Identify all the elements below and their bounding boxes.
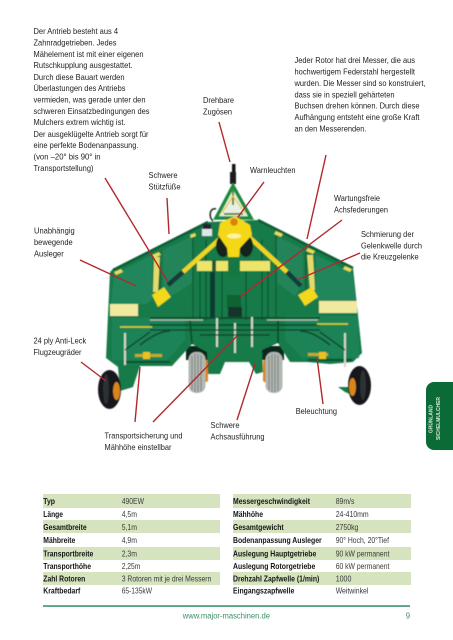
text block: Antrieb: Überlastungen des Antriebs	[34, 83, 126, 93]
label: Drehbare Zugösen: Drehbare	[203, 95, 234, 105]
side tab: Grünland Sichelmulcher: SICHELMULCHER	[436, 397, 442, 440]
icon: right middle wheel	[261, 346, 284, 393]
text block: Rotor: Aufhängung entsteht eine große Kraft	[294, 112, 420, 122]
text block: Antrieb: Zahnradgetrieben. Jedes	[34, 38, 116, 48]
right yellow gearbox	[298, 287, 318, 306]
table: left specs: 2,25m	[122, 562, 141, 571]
text block: Antrieb: Der Antrieb besteht aus 4	[34, 26, 118, 36]
table: right specs: Mähhöhe	[233, 510, 263, 519]
pointer: Flugzeugräder	[81, 362, 106, 381]
label: Beleuchtung: Beleuchtung	[296, 406, 337, 416]
icon: left middle wheel	[186, 346, 209, 393]
pointer: Warnleuchten	[238, 182, 264, 217]
side tab: Grünland Sichelmulcher	[426, 382, 453, 450]
text block: Antrieb: schweren Einsatzbedingungen des	[34, 106, 150, 116]
gear housing highlight	[227, 234, 241, 238]
right model plate	[319, 301, 357, 313]
label: Unabhängig bewegende Ausleger: bewegende	[34, 237, 73, 247]
centre gearbox block	[227, 295, 242, 317]
icon: left outer wheel	[98, 370, 121, 409]
label: Schmierung: die Kreuzgelenke	[361, 252, 419, 262]
centre deck ribs	[200, 240, 268, 320]
left yellow gearbox	[152, 287, 171, 307]
table: right specs: Messergeschwindigkeit	[233, 497, 310, 506]
text block: Antrieb: Mähelement ist mit einer eigenen	[34, 49, 144, 59]
table: right specs: 89m/s	[336, 497, 354, 506]
label: Flugzeugräder: 24 ply Anti-Leck	[34, 336, 87, 346]
table: left specs: Transporthöhe	[43, 562, 91, 571]
text block: Antrieb: (von –20° bis 90° in	[34, 152, 101, 162]
text block: Antrieb: Durch diese Bauart werden	[34, 72, 125, 82]
table: right specs: Gesamtgewicht	[233, 523, 284, 532]
label: Unabhängig bewegende Ausleger: Unabhängig	[34, 226, 75, 236]
text block: Rotor: dass sie in speziell gehärteten	[294, 90, 395, 100]
text block: Rotor: hochwertigem Federstahl hergestellt	[294, 66, 416, 76]
yellow crossbar	[197, 256, 270, 276]
table: left specs: Mähbreite	[43, 536, 76, 545]
label: Schwere Stützfüße: Stützfüße	[148, 182, 181, 192]
table: right specs: Auslegung Rotorgetriebe	[233, 562, 316, 571]
table: left specs: 4,9m	[122, 536, 137, 545]
label: Transportsicherung	[104, 430, 183, 452]
black drums behind gear housing	[216, 235, 253, 257]
horizontal push rods	[150, 319, 318, 321]
table: right specs: Drehzahl Zapfwelle (1/min)	[233, 574, 320, 583]
table: left specs: Transportbreite	[43, 549, 94, 558]
right lamp	[308, 352, 328, 359]
icon: right outer wheel	[348, 366, 371, 405]
pointer: Rotor Messer	[307, 155, 326, 239]
text block: Antrieb: Transportstellung)	[34, 163, 94, 173]
hydraulic hoses	[202, 209, 216, 236]
label: Unabhängig bewegende Ausleger: Ausleger	[34, 248, 64, 258]
table: left specs: Zahl Rotoren	[43, 574, 85, 583]
table: right specs: 2750kg	[336, 523, 359, 532]
pointer: Mähhöhe	[153, 336, 237, 422]
label: Warnleuchten: Warnleuchten	[250, 165, 296, 175]
table: left specs: 490EW	[122, 497, 144, 506]
footer: website: www.major-maschinen.de	[182, 612, 270, 620]
lower frame structure	[126, 318, 352, 362]
table: left specs: Typ	[43, 497, 55, 506]
yellow main gear housing	[218, 216, 252, 257]
label: Schwere Achsausführung: Schwere	[210, 420, 240, 430]
label: Flugzeugräder	[34, 336, 87, 357]
table: left specs: 2,3m	[122, 549, 137, 558]
text block: Antrieb: Rutschkupplung ausgestattet.	[34, 60, 132, 70]
text block: Antrieb: vermieden, was gerade unter den	[34, 94, 146, 104]
side tab: Grünland Sichelmulcher: GRÜNLAND	[428, 405, 434, 433]
text block: Rotor: wurden. Die Messer sind so konstruiert,	[294, 78, 426, 88]
table: right specs: Bodenanpassung Ausleger	[233, 536, 322, 545]
linkage dark bars	[125, 330, 345, 350]
left lamp	[135, 352, 162, 359]
table: left specs: 65-135kW	[122, 587, 152, 596]
pointer: Achsfederungen	[240, 220, 342, 297]
left model plate	[110, 304, 138, 316]
yellow corner tabs	[114, 231, 352, 275]
table: right specs: 1000	[336, 574, 352, 583]
table: left specs: Kraftbedarf	[43, 587, 81, 596]
text block: Rotor	[294, 55, 426, 134]
yellow side bars	[120, 324, 348, 327]
text block: Antrieb: eine perfekte Bodenanpassung.	[34, 140, 138, 150]
chrome rods	[125, 317, 345, 367]
label: Drehbare Zugösen	[203, 95, 234, 116]
label: Schmierung	[361, 229, 422, 262]
right yellow strip	[307, 255, 315, 290]
label: Schmierung: Gelenkwelle durch	[361, 240, 422, 250]
label: Wartungsfreie Achsfederungen: Wartungsfreie	[334, 193, 380, 203]
footer: page number: 9	[406, 612, 410, 620]
pointer: Transportsicherung	[135, 367, 140, 422]
table: right specs	[233, 494, 411, 596]
text block: Antrieb	[34, 26, 150, 173]
label: Flugzeugräder: Flugzeugräder	[34, 347, 82, 357]
table: left specs: Länge	[43, 510, 63, 519]
label: Schwere Stützfüße: Schwere	[148, 170, 178, 180]
lower side panels	[112, 316, 359, 360]
left yellow strip	[153, 257, 160, 292]
table: right specs: Weitwinkel	[336, 587, 369, 596]
label: Wartungsfreie Achsfederungen: Achsfederungen	[334, 204, 388, 214]
text block: Antrieb: Mulchers extrem wichtig ist.	[34, 117, 126, 127]
lifting arms	[168, 236, 301, 286]
table: left specs: 4,5m	[122, 510, 137, 519]
table: right specs: 90° Hoch, 20°Tief	[336, 536, 390, 545]
table: left specs: 3 Rotoren mit je drei Messern	[122, 574, 212, 583]
table: right specs: 90 kW permanent	[336, 549, 390, 558]
mower deck body	[106, 220, 362, 395]
right wing panels	[258, 220, 356, 320]
label: Drehbare Zugösen: Zugösen	[203, 106, 232, 116]
table: left specs: Gesamtbreite	[43, 523, 87, 532]
pointer: Achsausführung	[237, 364, 255, 420]
pointer: Zugösen	[219, 122, 230, 162]
table: left specs	[43, 494, 220, 596]
left wing panels	[111, 222, 208, 320]
table: left specs: 5,1m	[122, 523, 137, 532]
label: Transportsicherung: Mähhöhe einstellbar	[104, 442, 172, 452]
label: Schmierung: Schmierung der	[361, 229, 414, 239]
centre dark strap	[210, 272, 215, 318]
drawbar hitch	[216, 164, 251, 218]
table: right specs: 24-410mm	[336, 510, 369, 519]
machine: mulcher photo illustration	[98, 164, 371, 409]
text block: Rotor: an den Messerenden.	[294, 124, 366, 134]
table: right specs: Auslegung Hauptgetriebe	[233, 549, 317, 558]
label: Schwere Achsausführung	[210, 420, 265, 442]
pointer: Antrieb	[105, 178, 168, 282]
text block: Rotor: Jeder Rotor hat drei Messer, die aus	[294, 55, 415, 65]
table: right specs: Eingangszapfwelle	[233, 587, 295, 596]
label: Schwere Achsausführung: Achsausführung	[210, 432, 265, 442]
label: Unabhängig bewegende Ausleger	[34, 226, 75, 258]
orange warning light	[230, 218, 238, 226]
text block: Antrieb: Der ausgeklügelte Antrieb sorgt für	[34, 129, 149, 139]
table: right specs: 60 kW permanent	[336, 562, 390, 571]
text block: Rotor: Buchsen drehen können. Durch diese	[294, 100, 420, 110]
label: Transportsicherung: Transportsicherung und	[104, 430, 183, 440]
pointer: Ausleger	[80, 260, 136, 286]
pointer: Stützfüße	[167, 198, 169, 234]
pointer: Schmierung	[297, 253, 360, 280]
pointer: Beleuchtung	[317, 358, 323, 404]
label: Schwere Stützfüße	[148, 170, 181, 192]
label: Wartungsfreie Achsfederungen	[334, 193, 388, 214]
